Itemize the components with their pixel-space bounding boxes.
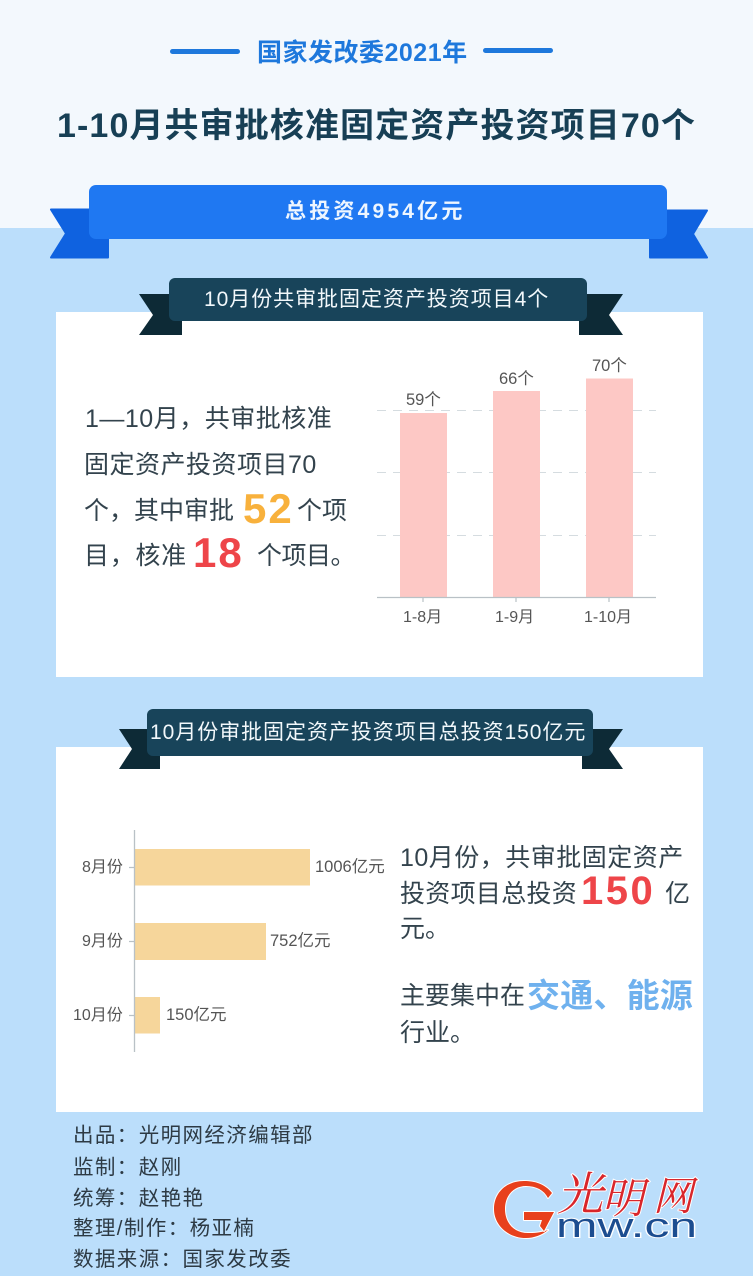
number 52: 52 xyxy=(243,485,294,532)
bar chart: cumulative projects: 1-10月 xyxy=(584,609,632,626)
text block: panel 1 description: 个，其中审批 xyxy=(84,497,234,525)
text block: panel 1 description: 1—10月，共审批核准 xyxy=(85,405,332,433)
subtitle: 国家发改委2021年 xyxy=(170,39,553,67)
text block: panel 1 description xyxy=(84,405,355,576)
ribbon label: 总投资4954亿元 xyxy=(285,200,466,223)
logo wordmark latin: mw.cn xyxy=(556,1207,697,1245)
text block: panel 2 description: 行业。 xyxy=(400,1019,475,1047)
heading label: 10月份共审批固定资产投资项目4个 xyxy=(204,288,549,311)
number 150: 150 xyxy=(581,869,655,913)
panel: October approved projects xyxy=(56,312,703,677)
category labels: 8月份 xyxy=(82,859,123,876)
bars xyxy=(400,378,633,597)
panel: October investment xyxy=(56,747,703,1112)
bar chart: cumulative projects xyxy=(377,357,656,626)
ribbon: section heading 1 xyxy=(139,278,623,335)
highlight: industries: 交通、能源 xyxy=(527,977,693,1014)
subtitle: 国家发改委2021年: 国家发改委2021年 xyxy=(257,39,468,67)
text block: panel 1 description: 固定资产投资项目70 xyxy=(84,451,317,479)
bar chart: cumulative projects: 1-9月 xyxy=(495,609,534,626)
text block: panel 2 description: 投资项目总投资 xyxy=(400,880,577,908)
credits: 统筹：赵艳艳 xyxy=(73,1187,204,1210)
text block: panel 1 description: 个项 xyxy=(297,497,347,525)
text block: panel 2 description: 元。 xyxy=(400,915,450,943)
logo wordmark cn: 光 xyxy=(557,1169,607,1220)
ribbon: section heading 2 xyxy=(119,709,623,769)
value labels: 1006亿元 xyxy=(315,858,385,876)
text block: panel 1 description: 目，核准 xyxy=(84,542,187,570)
credits: 数据来源：国家发改委 xyxy=(73,1248,292,1271)
text block: panel 1 description: 个项目。 xyxy=(257,542,355,570)
value labels: 59个 xyxy=(406,391,441,409)
bars xyxy=(134,849,310,1034)
logo wordmark cn: 网 xyxy=(653,1174,698,1219)
horizontal bar chart: monthly investment: 9月份 xyxy=(82,933,123,950)
ribbon: total investment xyxy=(50,185,708,258)
heading label: 10月份审批固定资产投资项目总投资150亿元 xyxy=(150,721,586,744)
credits xyxy=(73,1124,314,1271)
bar chart: cumulative projects: 70个 xyxy=(592,357,627,375)
horizontal bar chart: monthly investment xyxy=(73,830,385,1052)
title: 1-10月共审批核准固定资产投资项目70个 xyxy=(57,107,696,145)
text block: panel 2 description: 亿 xyxy=(665,880,690,908)
credits: 出品：光明网经济编辑部 xyxy=(73,1124,314,1147)
horizontal bar chart: monthly investment: 10月份 xyxy=(73,1007,123,1024)
logo wordmark cn xyxy=(557,1169,698,1223)
number 18: 18 xyxy=(193,529,244,576)
text block: panel 2 description xyxy=(400,844,693,1047)
credits: 整理/制作：杨亚楠 xyxy=(73,1217,255,1240)
logo wordmark cn: 明 xyxy=(602,1177,650,1223)
horizontal bar chart: monthly investment: 150亿元 xyxy=(166,1006,227,1024)
logo: 光明网 gmw.cn xyxy=(493,1169,700,1245)
horizontal bar chart: monthly investment: 752亿元 xyxy=(270,932,331,950)
G mark xyxy=(494,1181,554,1238)
credits: 监制：赵刚 xyxy=(73,1156,182,1179)
bar chart: cumulative projects: 66个 xyxy=(499,370,534,388)
top background band xyxy=(0,0,753,228)
axis labels: 1-8月 xyxy=(403,609,442,626)
text block: panel 2 description: 主要集中在 xyxy=(400,982,525,1010)
text block: panel 2 description: 10月份，共审批固定资产 xyxy=(400,844,684,872)
